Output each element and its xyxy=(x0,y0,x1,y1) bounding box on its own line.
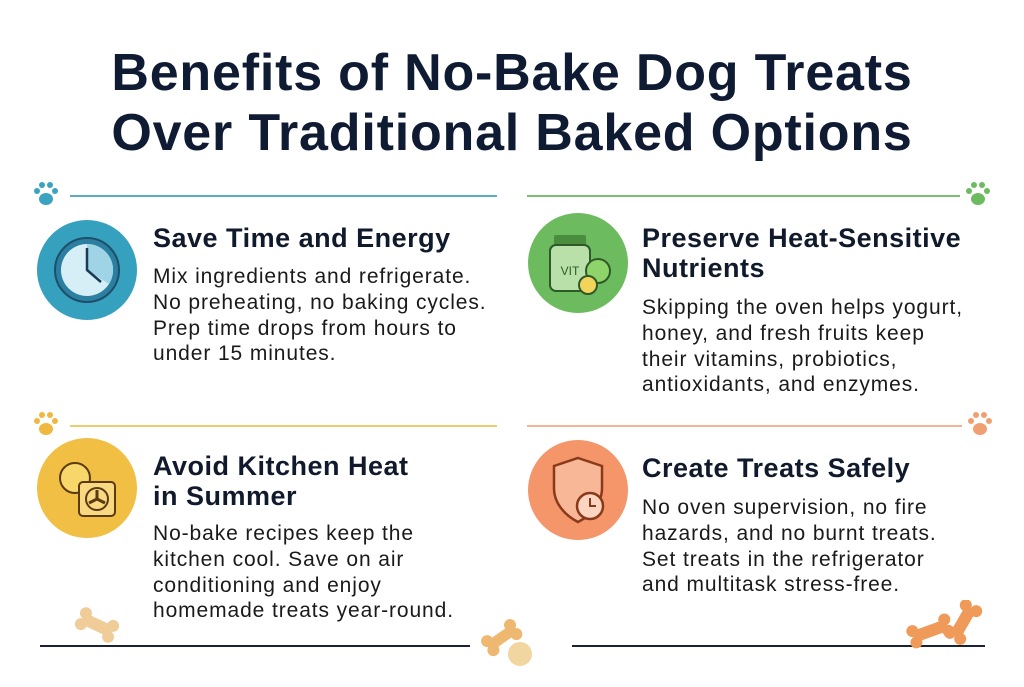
text xyxy=(153,265,486,365)
text: No preheating, no baking cycles. xyxy=(153,291,486,314)
text xyxy=(642,496,937,596)
heading: in Summer xyxy=(153,481,297,511)
icon: paw orange xyxy=(968,412,992,435)
icon: bone left xyxy=(74,607,120,643)
text: conditioning and enjoy xyxy=(153,574,382,597)
icon: clock xyxy=(37,220,137,320)
text: Mix ingredients and refrigerate. xyxy=(153,265,471,288)
icon: shield timer xyxy=(528,440,628,540)
title: Over Traditional Baked Options xyxy=(111,104,913,162)
text: Skipping the oven helps yogurt, xyxy=(642,296,963,319)
text: antioxidants, and enzymes. xyxy=(642,373,920,396)
icon: biscuits center xyxy=(481,619,532,666)
icon: vitamin jar: VIT xyxy=(561,264,580,278)
icon: sun and fan xyxy=(37,438,137,538)
panel: kitchen heat xyxy=(37,438,454,622)
text: No oven supervision, no fire xyxy=(642,496,928,519)
icon: paw green xyxy=(966,182,990,205)
text: their vitamins, probiotics, xyxy=(642,348,897,371)
text xyxy=(642,296,963,396)
heading: Nutrients xyxy=(642,253,765,283)
heading xyxy=(153,451,409,511)
title: Benefits of No-Bake Dog Treats xyxy=(111,44,913,102)
text: homemade treats year-round. xyxy=(153,599,454,622)
text: Set treats in the refrigerator xyxy=(642,548,925,571)
text: and multitask stress-free. xyxy=(642,573,900,596)
heading: Preserve Heat-Sensitive xyxy=(642,223,961,253)
text: No-bake recipes keep the xyxy=(153,522,414,545)
heading: Create Treats Safely xyxy=(642,453,910,483)
panel: nutrients xyxy=(528,213,963,396)
icon: vitamin jar xyxy=(528,213,628,313)
icon: paw yellow xyxy=(34,412,58,435)
panel: save time xyxy=(37,220,486,365)
icon: paw teal xyxy=(34,182,58,205)
text: honey, and fresh fruits keep xyxy=(642,322,925,345)
text: hazards, and no burnt treats. xyxy=(642,522,937,545)
icon: bones right xyxy=(906,600,982,648)
heading: Save Time and Energy xyxy=(153,223,451,253)
panel: safely xyxy=(528,440,937,596)
title xyxy=(111,44,913,162)
heading xyxy=(642,223,961,283)
text: kitchen cool. Save on air xyxy=(153,548,404,571)
text: under 15 minutes. xyxy=(153,342,336,365)
heading: Avoid Kitchen Heat xyxy=(153,451,409,481)
text xyxy=(153,522,454,622)
text: Prep time drops from hours to xyxy=(153,317,457,340)
